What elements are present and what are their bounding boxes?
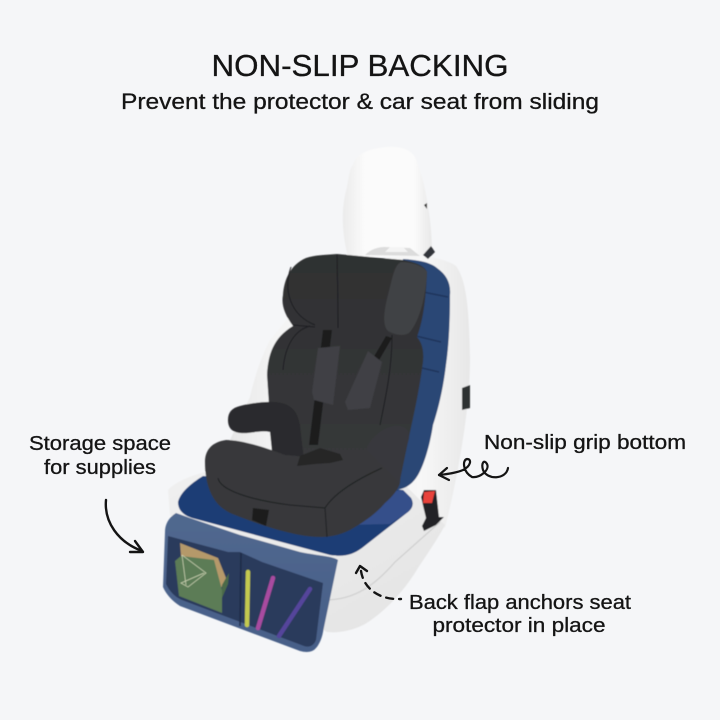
- cushion seam: [325, 522, 440, 600]
- base seams: [218, 468, 382, 537]
- purple pencil: [279, 589, 310, 636]
- arrow: non-slip grip: [439, 459, 508, 480]
- vehicle headrest: [343, 147, 435, 259]
- storage pocket: [166, 536, 323, 647]
- headrest seams: [283, 255, 392, 425]
- label: back flap: protector in place: [432, 615, 606, 637]
- pocket divider: [240, 553, 241, 626]
- left shoulder pad: [312, 346, 340, 405]
- left armrest: [228, 402, 304, 460]
- label: non-slip grip: Non-slip grip bottom: [484, 432, 686, 454]
- book back cover: [180, 543, 226, 590]
- yellow pencil: [247, 572, 248, 625]
- child seat base: [205, 440, 400, 537]
- label: back flap: Back flap anchors seat: [409, 592, 631, 614]
- pouch flap: [222, 573, 229, 598]
- pouch triangle sketch: [181, 555, 206, 587]
- label: storage space: for supplies: [44, 457, 156, 479]
- crotch buckle pad: [297, 448, 343, 466]
- label: back flap: [409, 592, 631, 637]
- title: NON-SLIP BACKING: [212, 48, 508, 83]
- subtitle: Prevent the protector & car seat from sliding: [121, 89, 599, 114]
- label: storage space: [29, 433, 171, 479]
- arrow: back flap: [356, 566, 401, 599]
- illustration: car seat with protector: [163, 147, 470, 652]
- lower strap: [252, 508, 269, 526]
- seat belt buckle: [421, 490, 444, 531]
- side seat buckle: [462, 385, 470, 410]
- green pouch: [175, 556, 222, 613]
- vehicle seat cushion: [168, 472, 445, 632]
- right armrest: [367, 426, 409, 483]
- child seat back shell: [267, 254, 427, 480]
- vehicle seat back: [230, 255, 470, 528]
- right headrest wing: [384, 262, 427, 335]
- pink pencil: [258, 578, 273, 628]
- label: storage space: Storage space: [29, 433, 171, 455]
- back mat stitching: [416, 292, 448, 372]
- seat mat of protector: [178, 476, 413, 556]
- right shoulder pad: [345, 351, 382, 410]
- arrow: storage space: [106, 500, 143, 552]
- back mat of protector: [380, 259, 450, 490]
- harness straps: [309, 330, 392, 445]
- front flap of protector: [163, 513, 338, 652]
